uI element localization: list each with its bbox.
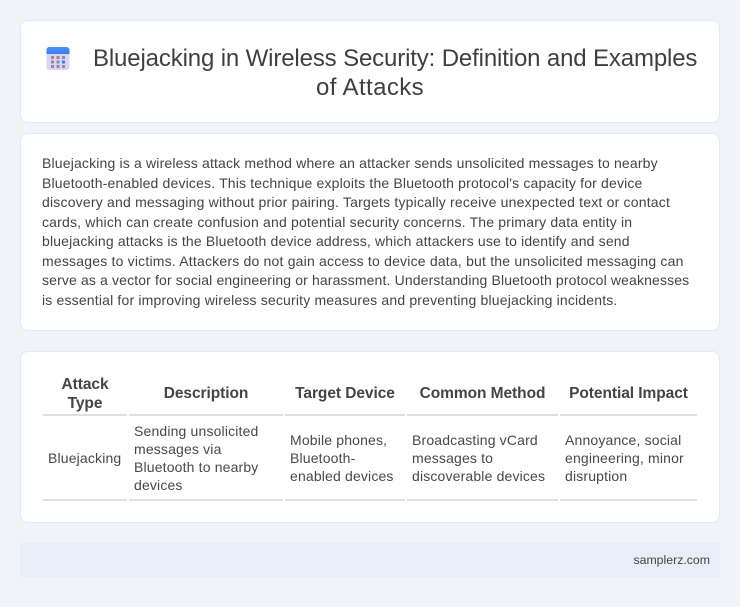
text block: bluejacking description: messages to victims. Attackers do not gain access to device data, but the unsolicited messaging can: [42, 252, 684, 268]
table row: Bluejacking: discoverable devices: [412, 468, 545, 484]
panel: attack table: [20, 351, 720, 523]
table row: Bluejacking: Bluetooth-: [290, 450, 355, 466]
footer credit: samplerz.com: [633, 553, 710, 567]
table row: Bluejacking: messages via: [134, 441, 222, 457]
footer bar: [20, 543, 720, 577]
text block: bluejacking description: serve as a vector for social engineering or harassment. Understanding Bluetooth protocol weaknesses: [42, 272, 689, 288]
title: of Attacks: [316, 74, 424, 101]
table row: Bluejacking: Broadcasting vCard: [412, 432, 538, 448]
table row: Bluejacking: [43, 423, 697, 501]
table header: Type: [68, 395, 102, 412]
title: Bluejacking in Wireless Security: Definition and Examples: [93, 45, 697, 72]
table header: Common Method: [420, 385, 545, 402]
table row: Bluejacking: Bluejacking: [48, 450, 121, 466]
panel: description text: [20, 133, 720, 331]
text block: bluejacking description: Bluejacking is a wireless attack method where an attacker sends unsolicited messages to nearby: [42, 155, 658, 171]
table row: Bluejacking: Bluetooth to nearby: [134, 459, 258, 475]
text block: bluejacking description: bluejacking attacks is the Bluetooth device address, which attackers use to identify and send: [42, 233, 630, 249]
icon: calendar: [46, 47, 70, 70]
table row: Bluejacking: Annoyance, social: [565, 432, 681, 448]
table row: Bluejacking: enabled devices: [290, 468, 394, 484]
text block: bluejacking description: cards, which can create confusion and potential security concerns. The primary data entity in: [42, 214, 632, 230]
text block: bluejacking description: Bluetooth-enabled devices. This technique exploits the Bluetooth protocol's capacity for device: [42, 174, 643, 190]
text block: bluejacking description: discovery and messaging without prior pairing. Targets typically receive unexpected text or contact: [42, 194, 670, 210]
table row: Bluejacking: messages to: [412, 450, 493, 466]
table header: Description: [164, 385, 248, 402]
table row: Bluejacking: disruption: [565, 468, 627, 484]
table header: Target Device: [295, 385, 395, 402]
table row: Bluejacking: Sending unsolicited: [134, 423, 258, 439]
text block: bluejacking description: is essential for improving wireless security measures and preventing bluejacking incidents.: [42, 292, 618, 308]
table row: Bluejacking: Mobile phones,: [290, 432, 387, 448]
text block: bluejacking description: [42, 155, 689, 308]
panel: title card: [20, 20, 720, 123]
table row: Bluejacking: engineering, minor: [565, 450, 684, 466]
table header: Potential Impact: [569, 385, 688, 402]
title: [93, 45, 697, 101]
table header: Attack: [61, 376, 109, 393]
table header: [43, 376, 697, 416]
table row: Bluejacking: devices: [134, 477, 183, 493]
